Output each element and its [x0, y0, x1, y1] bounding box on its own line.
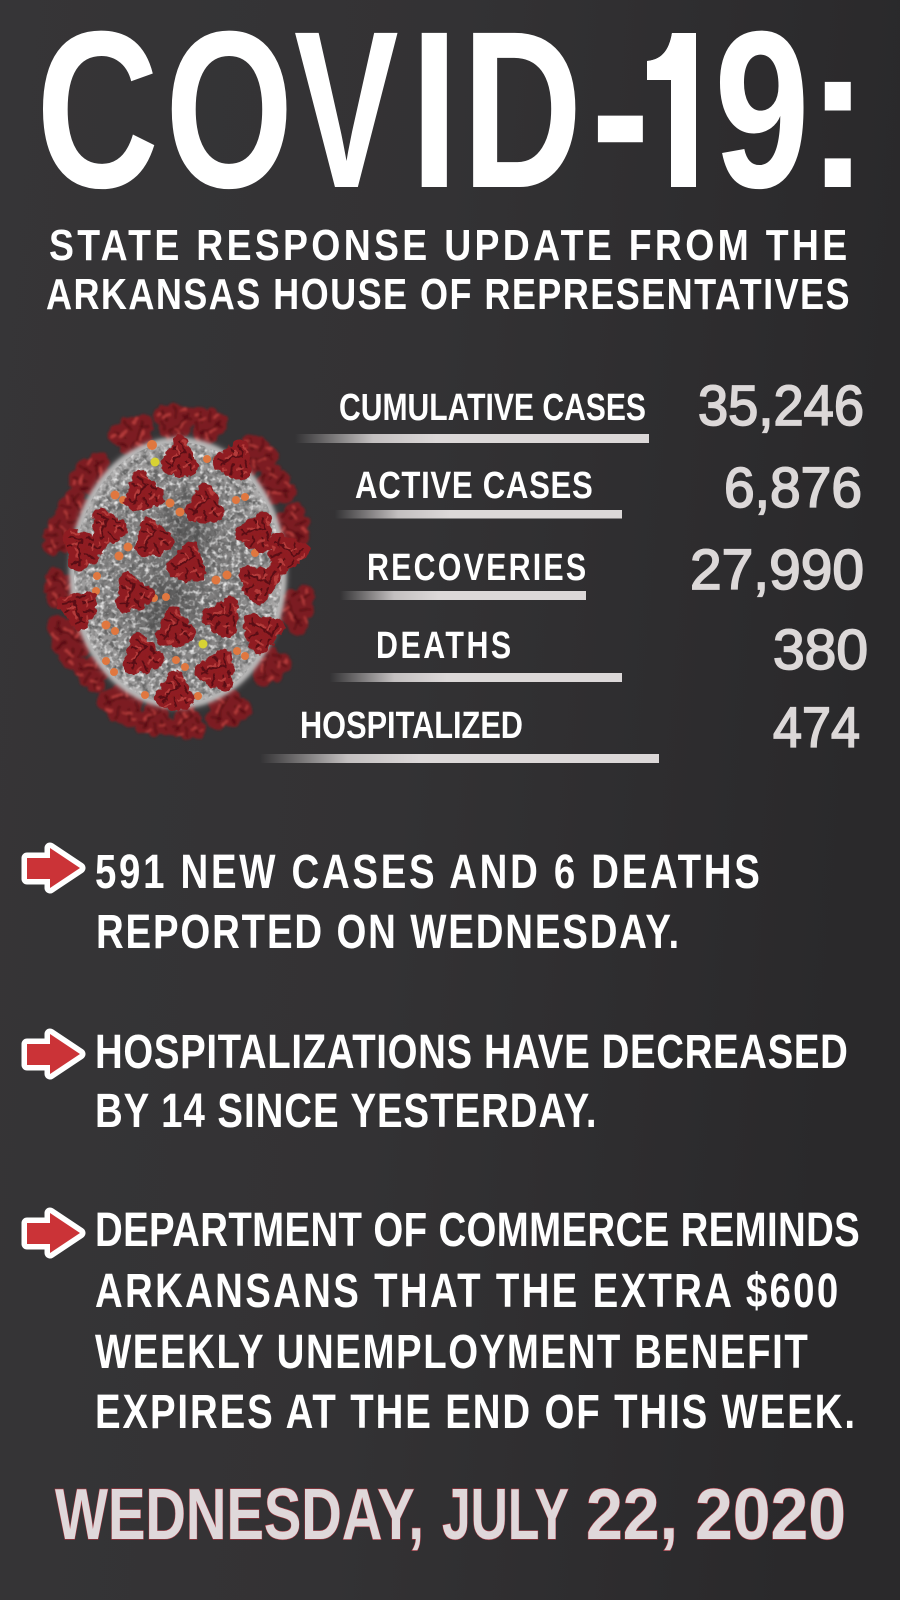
bullet: hospitalizations [27, 1026, 848, 1138]
bullet: new cases [27, 846, 760, 959]
bullet: new cases: 591 NEW CASES AND 6 DEATHS [95, 846, 760, 899]
bullet: department of commerce [27, 1204, 860, 1439]
stat: active cases: 6,876 [724, 456, 862, 520]
stat: active cases: ACTIVE CASES [355, 465, 593, 507]
bullet: hospitalizations: BY 14 SINCE YESTERDAY. [95, 1085, 597, 1138]
bullet: new cases: REPORTED ON WEDNESDAY. [96, 906, 679, 959]
date: 2020 [695, 1475, 846, 1555]
stat: recoveries: RECOVERIES [367, 547, 586, 589]
bullet: department of commerce: ARKANSANS THAT THE EXTRA $600 [95, 1265, 838, 1318]
stat: recoveries: 27,990 [690, 538, 864, 602]
title [43, 30, 851, 190]
bullet: hospitalizations: HOSPITALIZATIONS HAVE DECREASED [95, 1026, 848, 1079]
icon: arrow [27, 848, 80, 888]
stat: recoveries [340, 538, 864, 602]
bullet: department of commerce: EXPIRES AT THE END OF THIS WEEK. [95, 1386, 855, 1439]
bullet: department of commerce: DEPARTMENT OF COMMERCE REMINDS [95, 1204, 860, 1257]
sphere [70, 438, 286, 708]
subtitle: ARKANSAS HOUSE OF REPRESENTATIVES [46, 270, 850, 319]
bullet: department of commerce: WEEKLY UNEMPLOYMENT BENEFIT [95, 1326, 808, 1379]
stat: cumulative cases: CUMULATIVE CASES [339, 387, 646, 429]
stat: deaths: DEATHS [376, 625, 511, 667]
title: : [807, 0, 869, 231]
icon: coronavirus [39, 403, 318, 740]
date: WEDNESDAY, [55, 1475, 424, 1555]
icon: arrow [27, 1034, 80, 1074]
stat: cumulative cases [295, 374, 864, 443]
date: JULY [442, 1475, 569, 1555]
stat: deaths: 380 [773, 618, 868, 682]
icon: arrow [27, 1213, 80, 1253]
stat: hospitalized: 474 [773, 696, 860, 760]
subtitle [46, 220, 850, 319]
stat: deaths [330, 618, 868, 682]
date [55, 1475, 846, 1555]
date: 22, [586, 1475, 678, 1555]
stat: hospitalized [260, 696, 860, 763]
stat: active cases [335, 456, 862, 520]
stat: hospitalized: HOSPITALIZED [300, 705, 523, 747]
subtitle: STATE RESPONSE UPDATE FROM THE [49, 220, 847, 270]
stat: cumulative cases: 35,246 [698, 374, 864, 438]
